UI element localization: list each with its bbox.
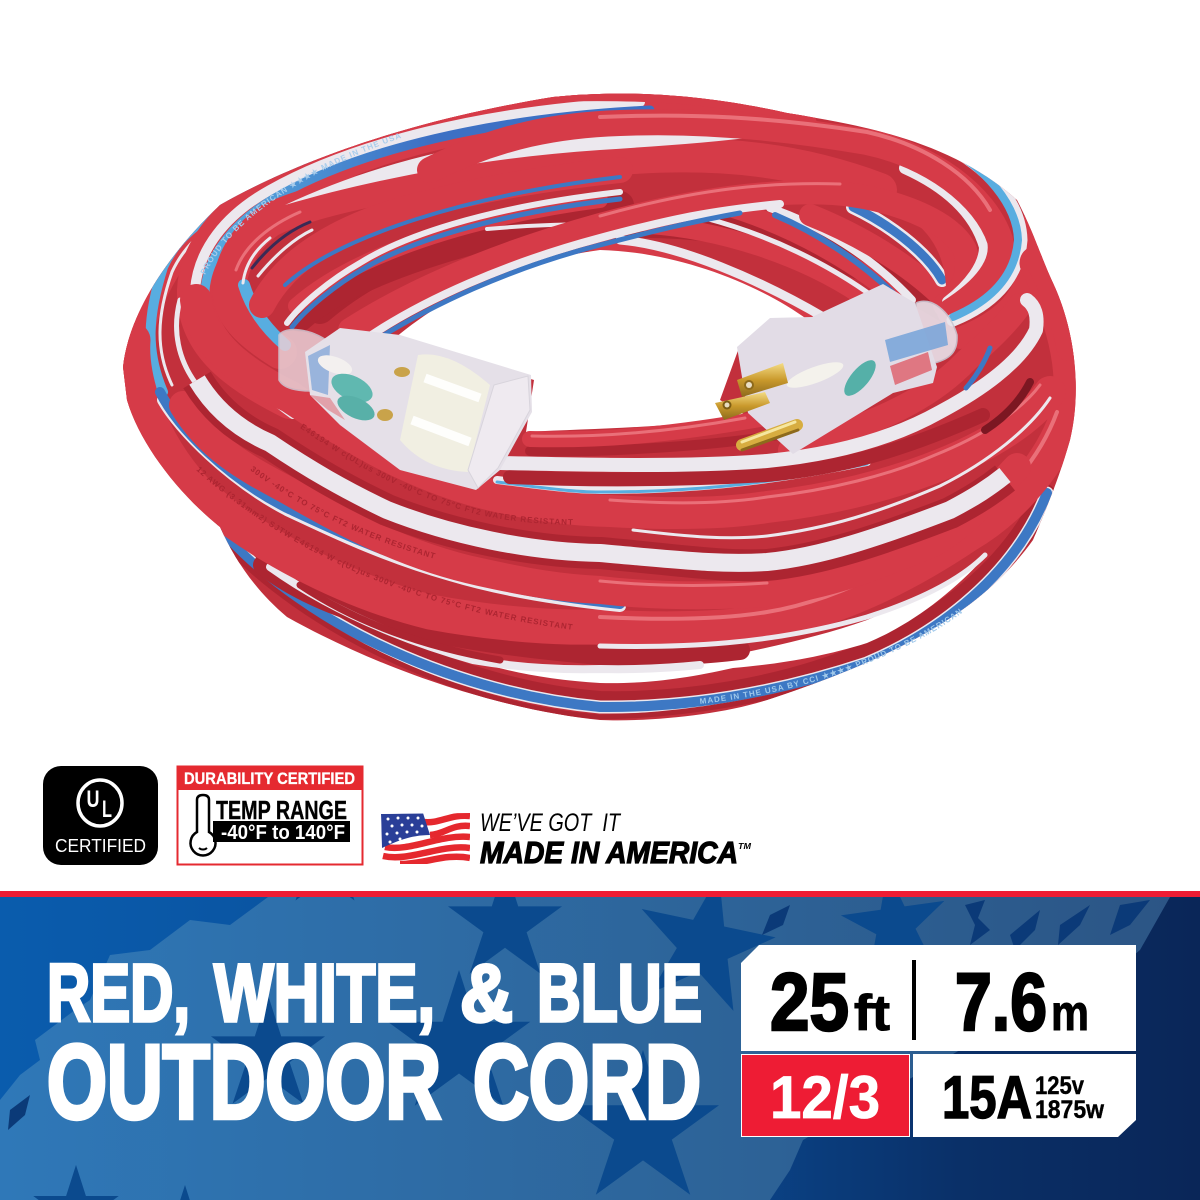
cord legends: 300V -40°C TO 75°C FT2 WATER RESISTANT [250,466,436,558]
socket end (translucent connector) [279,328,532,490]
text: we've got it made in America: WE’VE GOT IT [480,809,621,837]
text: we've got it made in America: TM [738,842,751,851]
gap between cords [498,565,978,684]
hole in the coil [395,250,808,432]
cord legends: MADE IN THE USA BY CCI ★★★★ PROUD TO BE AMERICAN [700,608,962,704]
panel: amperage and power: 125v [1035,1072,1084,1100]
red rule above banner [0,891,1200,897]
panel: blue banner background with stars [0,897,1200,1200]
badge: UL certified: L [102,796,112,823]
panel: amperage and power [913,1054,1136,1137]
plug end with brass prongs [715,284,957,454]
title [47,948,702,1141]
panel: length specs: ft [854,985,890,1041]
title: BLUE [537,948,702,1039]
badge: durability certified temp range: DURABILITY CERTIFIED [184,769,355,788]
cord legends: PROUD TO BE AMERICAN ★★★★ MADE IN THE USA [200,133,402,274]
product photo: coiled extension cord [123,94,1076,720]
panel: length specs: 7.6 [955,957,1047,1048]
panel: length specs [741,945,1136,1051]
badge: UL certified [43,766,158,865]
title: OUTDOOR [47,1024,441,1141]
panel: wire gauge [741,1054,910,1137]
text: we've got it made in America: MADE IN AMERICA [480,835,738,870]
title: & [460,948,513,1039]
panel: amperage and power: 15A [942,1064,1032,1131]
panel: length specs: 25 [770,957,849,1048]
badge: made in America flag [381,813,471,865]
panel: length specs: m [1051,985,1089,1041]
icon: thermometer [190,795,216,855]
lower blue-striped cord [223,495,1045,702]
badge: durability certified temp range: TEMP RANGE [216,795,347,825]
cord legends: 12 AWG (3.31mm2) SJTW E46194 W c(UL)us 300V -40°C TO 75°C FT2 WATER RESISTANT [196,467,573,630]
panel: amperage and power: 1875w [1035,1096,1105,1124]
text: we've got it made in America [480,809,751,870]
front cord strands [133,116,1071,717]
badge: UL certified: CERTIFIED [55,836,146,856]
title: RED, [47,948,190,1039]
rear cord strands [100,80,1100,730]
cord legends: E46194 W c(UL)us 300V -40°C TO 75°C FT2 WATER RESISTANT [300,424,573,524]
badge: UL certified: U [86,786,100,813]
title: WHITE, [214,948,435,1039]
badge: durability certified temp range [177,766,363,864]
badge: durability certified temp range: -40°F to 140°F [221,822,345,844]
cord legends [196,133,962,704]
title: CORD [473,1024,701,1141]
panel: wire gauge: 12/3 [770,1064,880,1131]
right rear strands [612,218,930,304]
